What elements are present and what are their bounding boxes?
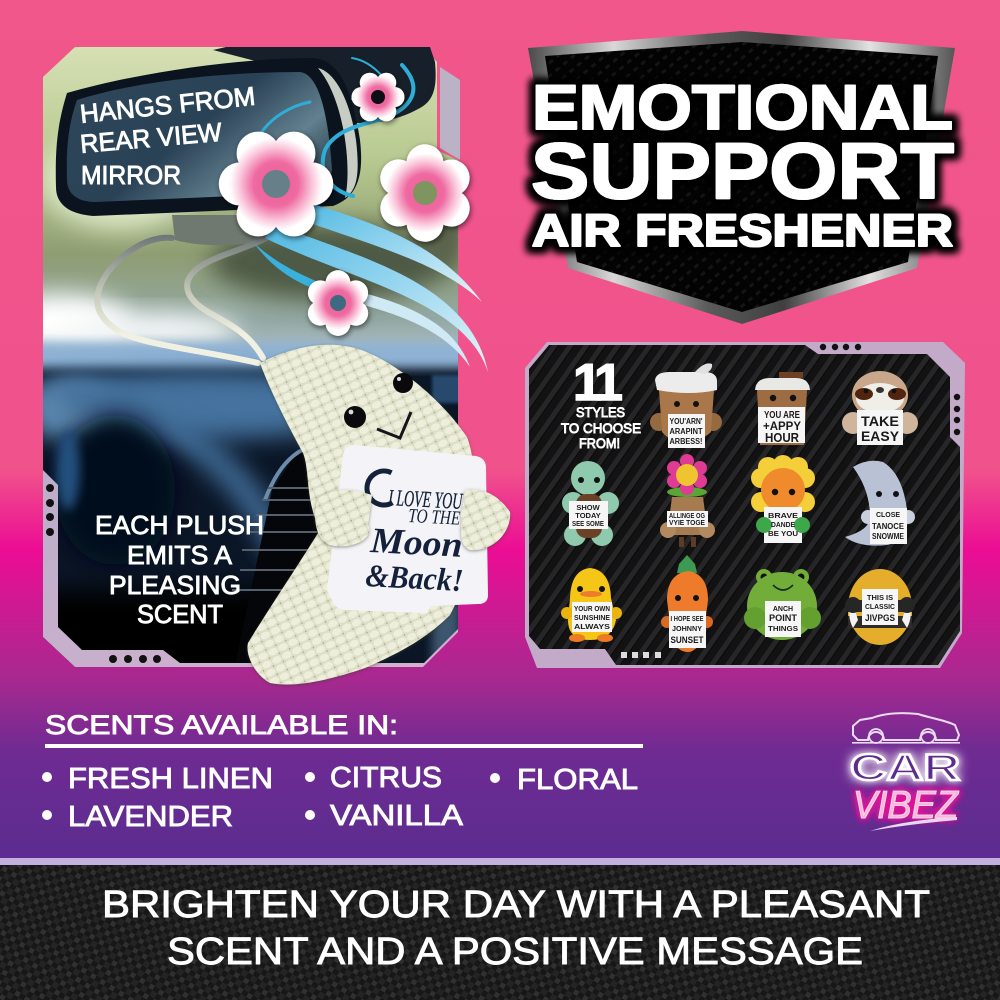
plush sign: I LOVE YOU: [387, 485, 464, 514]
style: coffee cup happy hour: [755, 372, 810, 445]
mirror glass: [67, 72, 332, 202]
scents list: LAVENDER: [68, 801, 233, 833]
scents heading: SCENTS AVAILABLE IN:: [45, 710, 398, 740]
plush sign: [327, 445, 488, 613]
mirror label: [78, 81, 257, 190]
plush body: [247, 345, 475, 685]
logo car outline: [853, 713, 959, 740]
plush sign: TO THE: [408, 505, 461, 530]
style: coffee cup happy hour: YOU ARE: [764, 410, 800, 421]
title: SUPPORT: [531, 126, 954, 215]
panel caption: SCENT: [137, 599, 223, 629]
style: sunflower: [751, 455, 815, 543]
style: duck: [561, 568, 622, 642]
logo halo: [848, 752, 962, 782]
styles heading: [561, 354, 641, 451]
style: frog: [744, 569, 821, 640]
style: bumble bee: JIVPGS: [865, 613, 895, 623]
style: frog: POINT: [769, 613, 797, 623]
title shield: [528, 31, 955, 324]
flower: right: [360, 130, 490, 256]
flower: large: [219, 132, 333, 236]
panel: rear view mirror photo: [43, 47, 458, 667]
scent swooshes: [254, 58, 488, 372]
scents divider: [45, 744, 643, 748]
logo word vibez: VIBEZ: [853, 784, 959, 827]
style: bumble bee: CLASSIC: [865, 602, 896, 611]
mirror label: HANGS FROM: [78, 81, 257, 129]
style: duck: YOUR OWN: [574, 604, 610, 613]
style: coffee cup happy hour: HOUR: [765, 430, 800, 445]
logo baseline: [852, 742, 960, 744]
styles heading: STYLES: [576, 404, 625, 420]
style: bumble bee: THIS IS: [867, 593, 893, 602]
footer divider: [0, 858, 1000, 865]
flower: small top: [352, 73, 404, 121]
footer carbon band: [0, 865, 1000, 1000]
style: sunflower: DANDE: [771, 520, 795, 529]
style: turtle: [562, 461, 619, 546]
style: moon: CLOSE: [876, 512, 900, 519]
style: duck: ALWAYS: [574, 622, 610, 631]
mirror stem: [172, 215, 270, 245]
photo backdrop: [43, 47, 458, 667]
style: duck: SUNSHINE: [574, 613, 610, 622]
style: potted plant: VYIE TOGE: [669, 520, 705, 527]
mirror edge highlight: [318, 68, 358, 198]
mirror label: REAR VIEW: [79, 117, 223, 159]
style: bumble bee: [845, 569, 915, 645]
style: carrot: I HOPE SEE: [670, 614, 704, 623]
style: frog: THINGS: [768, 624, 798, 633]
logo word car: CAR: [850, 747, 960, 788]
scents list: VANILLA: [330, 800, 464, 832]
flower: lower: [295, 261, 381, 345]
style: sloth: EASY: [861, 428, 900, 444]
scents list: CITRUS: [330, 762, 442, 794]
plush sign: Moon: [369, 520, 464, 565]
styles heading: 11: [573, 354, 623, 412]
plush eyes: [344, 373, 413, 428]
style: frog: ANCH: [773, 606, 793, 613]
scents list: FLORAL: [517, 764, 638, 796]
style: coffee cup white lid: ARAPINT: [670, 427, 703, 436]
logo: car vibez: [848, 713, 962, 831]
style: sunflower: BRAVE: [768, 511, 798, 520]
panel caption: EMITS A: [127, 540, 233, 570]
plush sign: &Back!: [365, 557, 464, 598]
style: moon: TANOCE: [872, 522, 905, 531]
style: turtle: SEE SOME: [572, 519, 604, 528]
style: potted plant: ALLINGE OG: [669, 513, 705, 520]
style: carrot: JOHNNY: [672, 624, 702, 633]
headliner behind mirror: [213, 47, 436, 123]
mirror housing: [56, 58, 361, 216]
style: sunflower: BE YOU: [768, 529, 798, 538]
style: sloth: [842, 371, 918, 445]
mirror label: MIRROR: [81, 160, 181, 190]
scents list: [42, 762, 638, 833]
logo swoosh: [870, 817, 957, 831]
panel caption: [95, 510, 264, 629]
panel dots: [621, 344, 960, 658]
panel frame: side tab: [440, 67, 460, 160]
style: turtle: TODAY: [575, 511, 601, 520]
title: EMOTIONAL: [532, 73, 953, 143]
style: potted plant: [660, 454, 715, 547]
style: coffee cup white lid: ARBESS!: [670, 437, 702, 446]
styles heading: TO CHOOSE: [561, 420, 641, 436]
style: coffee cup happy hour: +APPY: [763, 419, 801, 433]
style: coffee cup white lid: [650, 363, 722, 448]
style: sloth: TAKE: [861, 413, 899, 429]
style: moon: SNOWME: [872, 532, 905, 541]
scents list: FRESH LINEN: [68, 763, 273, 795]
style: carrot: SUNSET: [670, 635, 704, 645]
title: [531, 73, 954, 256]
panel: 11 styles: [525, 342, 965, 668]
panel caption: PLEASING: [109, 570, 241, 600]
plush smile: [377, 412, 411, 438]
styles heading: FROM!: [579, 435, 620, 451]
footer tagline: [102, 884, 930, 973]
hanging cord: [97, 236, 270, 363]
style: coffee cup white lid: YOU'ARN': [670, 417, 703, 426]
frame dots: [46, 484, 161, 663]
panel frame: lower left: [43, 470, 458, 667]
style: carrot: [661, 555, 713, 652]
style: turtle: SHOW: [576, 503, 601, 512]
footer tagline: SCENT AND A POSITIVE MESSAGE: [167, 931, 863, 973]
style: moon: [845, 461, 915, 546]
title: AIR FRESHENER: [532, 205, 953, 256]
eye glints: [349, 377, 401, 414]
footer tagline: BRIGHTEN YOUR DAY WITH A PLEASANT: [102, 884, 930, 926]
logo wheels: [869, 729, 935, 743]
plush arms: [315, 489, 510, 550]
panel caption: EACH PLUSH: [95, 510, 264, 540]
